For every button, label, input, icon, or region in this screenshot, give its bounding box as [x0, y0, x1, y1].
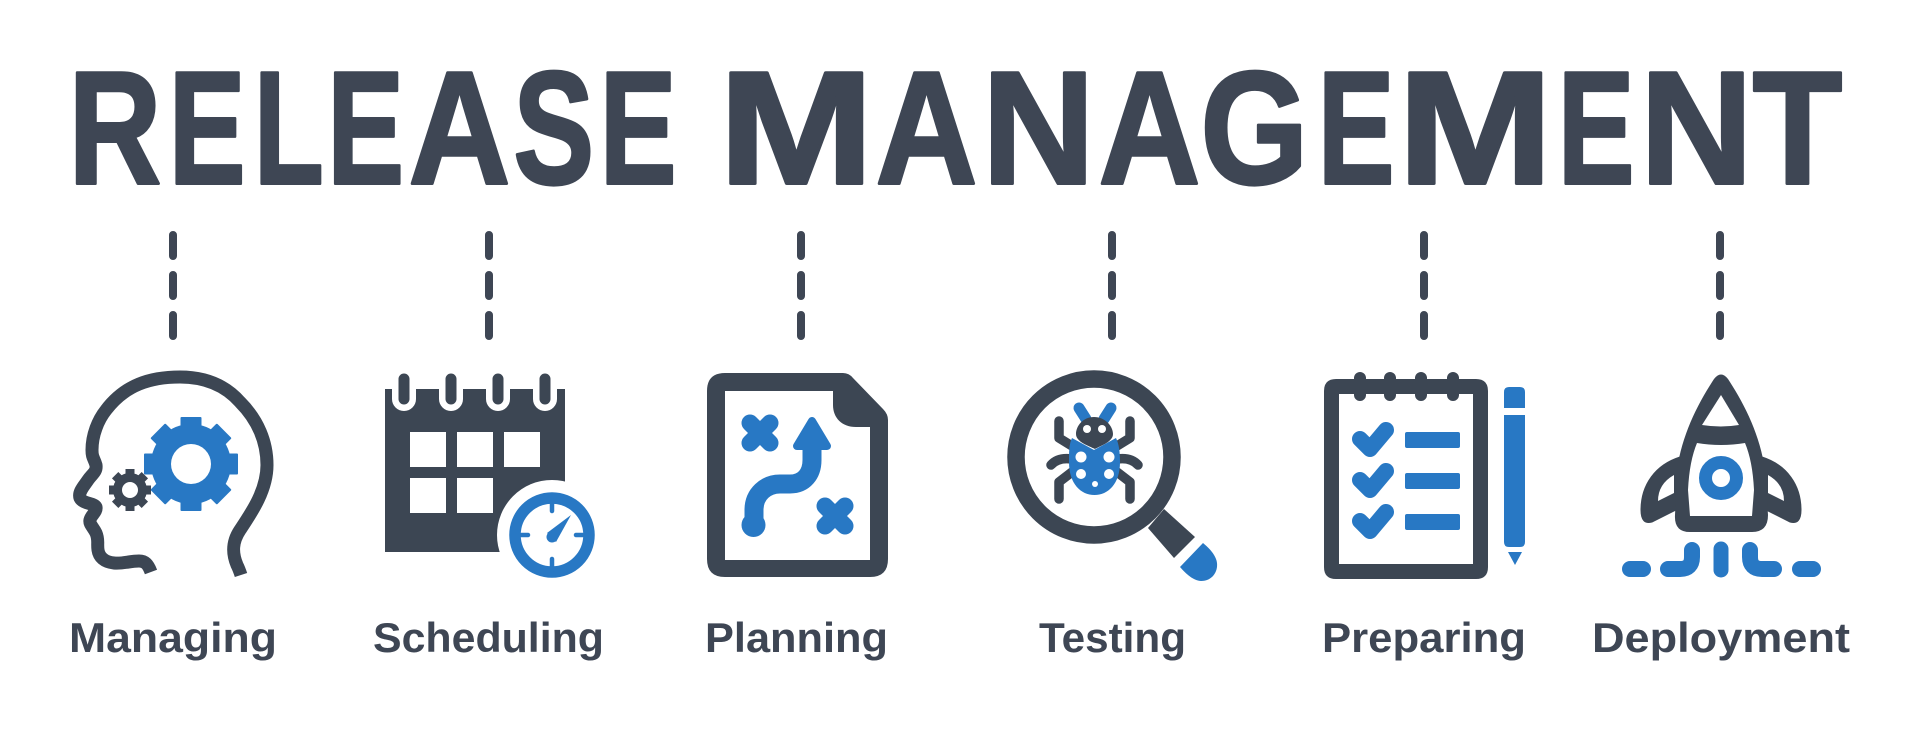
- icon: head with gears: [80, 377, 267, 575]
- title: N: [1640, 38, 1753, 218]
- title: E: [1558, 38, 1634, 218]
- title: M: [1398, 38, 1553, 218]
- dashed connectors: [173, 235, 1720, 336]
- title: E: [327, 38, 404, 218]
- icon: magnifier with bug: [1016, 379, 1217, 581]
- title: E: [1318, 38, 1394, 218]
- title: R: [68, 38, 161, 218]
- icon: calendar with clock: [385, 379, 607, 590]
- title: A: [876, 38, 978, 218]
- label: Deployment: Deployment: [1592, 614, 1850, 661]
- title: S: [513, 38, 594, 218]
- label: Testing: Testing: [1039, 614, 1186, 661]
- title: A: [408, 38, 510, 218]
- icon: rocket launch: [1630, 374, 1813, 570]
- title: M: [718, 38, 874, 218]
- title: N: [982, 38, 1095, 218]
- icon: planning document: [707, 373, 888, 577]
- title: E: [600, 38, 676, 218]
- label: Preparing: Preparing: [1322, 614, 1526, 661]
- title: E: [169, 38, 246, 218]
- icon: checklist notepad with pencil: [1324, 378, 1525, 579]
- title: L: [254, 38, 324, 218]
- title: T: [1753, 38, 1842, 218]
- label: Scheduling: Scheduling: [373, 614, 604, 661]
- title: A: [1098, 38, 1200, 218]
- label: Planning: Planning: [705, 614, 888, 661]
- label: Managing: Managing: [69, 614, 277, 661]
- title: G: [1200, 38, 1308, 218]
